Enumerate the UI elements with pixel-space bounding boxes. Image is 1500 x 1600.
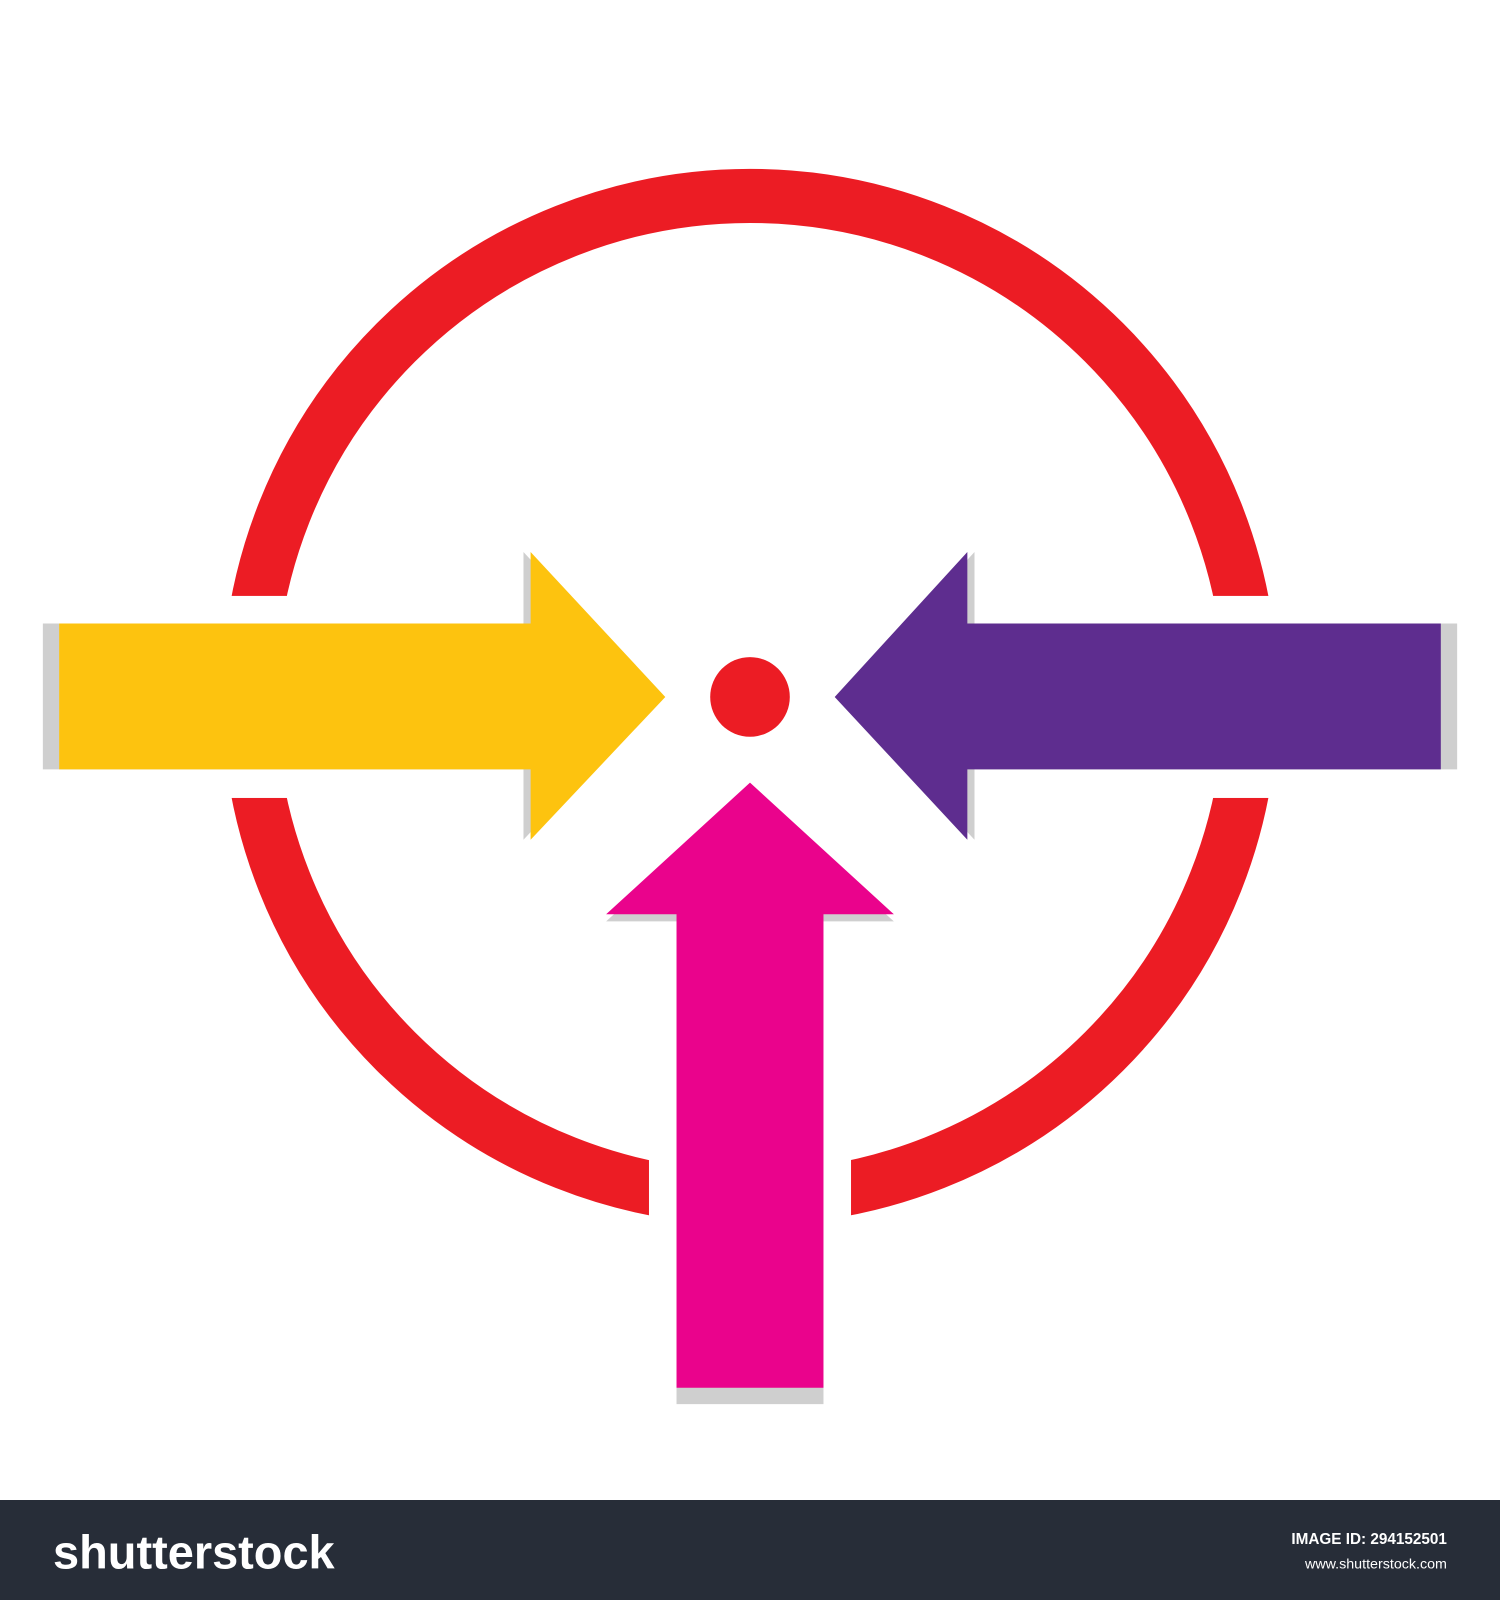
arrow: yellow pointing right [43, 552, 665, 840]
arrow: purple pointing left [835, 552, 1457, 840]
footer image id: IMAGE ID: 294152501 [1291, 1531, 1447, 1548]
arrow: magenta pointing up [606, 783, 894, 1404]
footer bar [0, 1500, 1500, 1600]
target ring [194, 196, 1306, 1245]
center dot [710, 657, 790, 737]
footer url: www.shutterstock.com [1304, 1556, 1447, 1572]
footer logo text: shutterstock [53, 1526, 336, 1578]
